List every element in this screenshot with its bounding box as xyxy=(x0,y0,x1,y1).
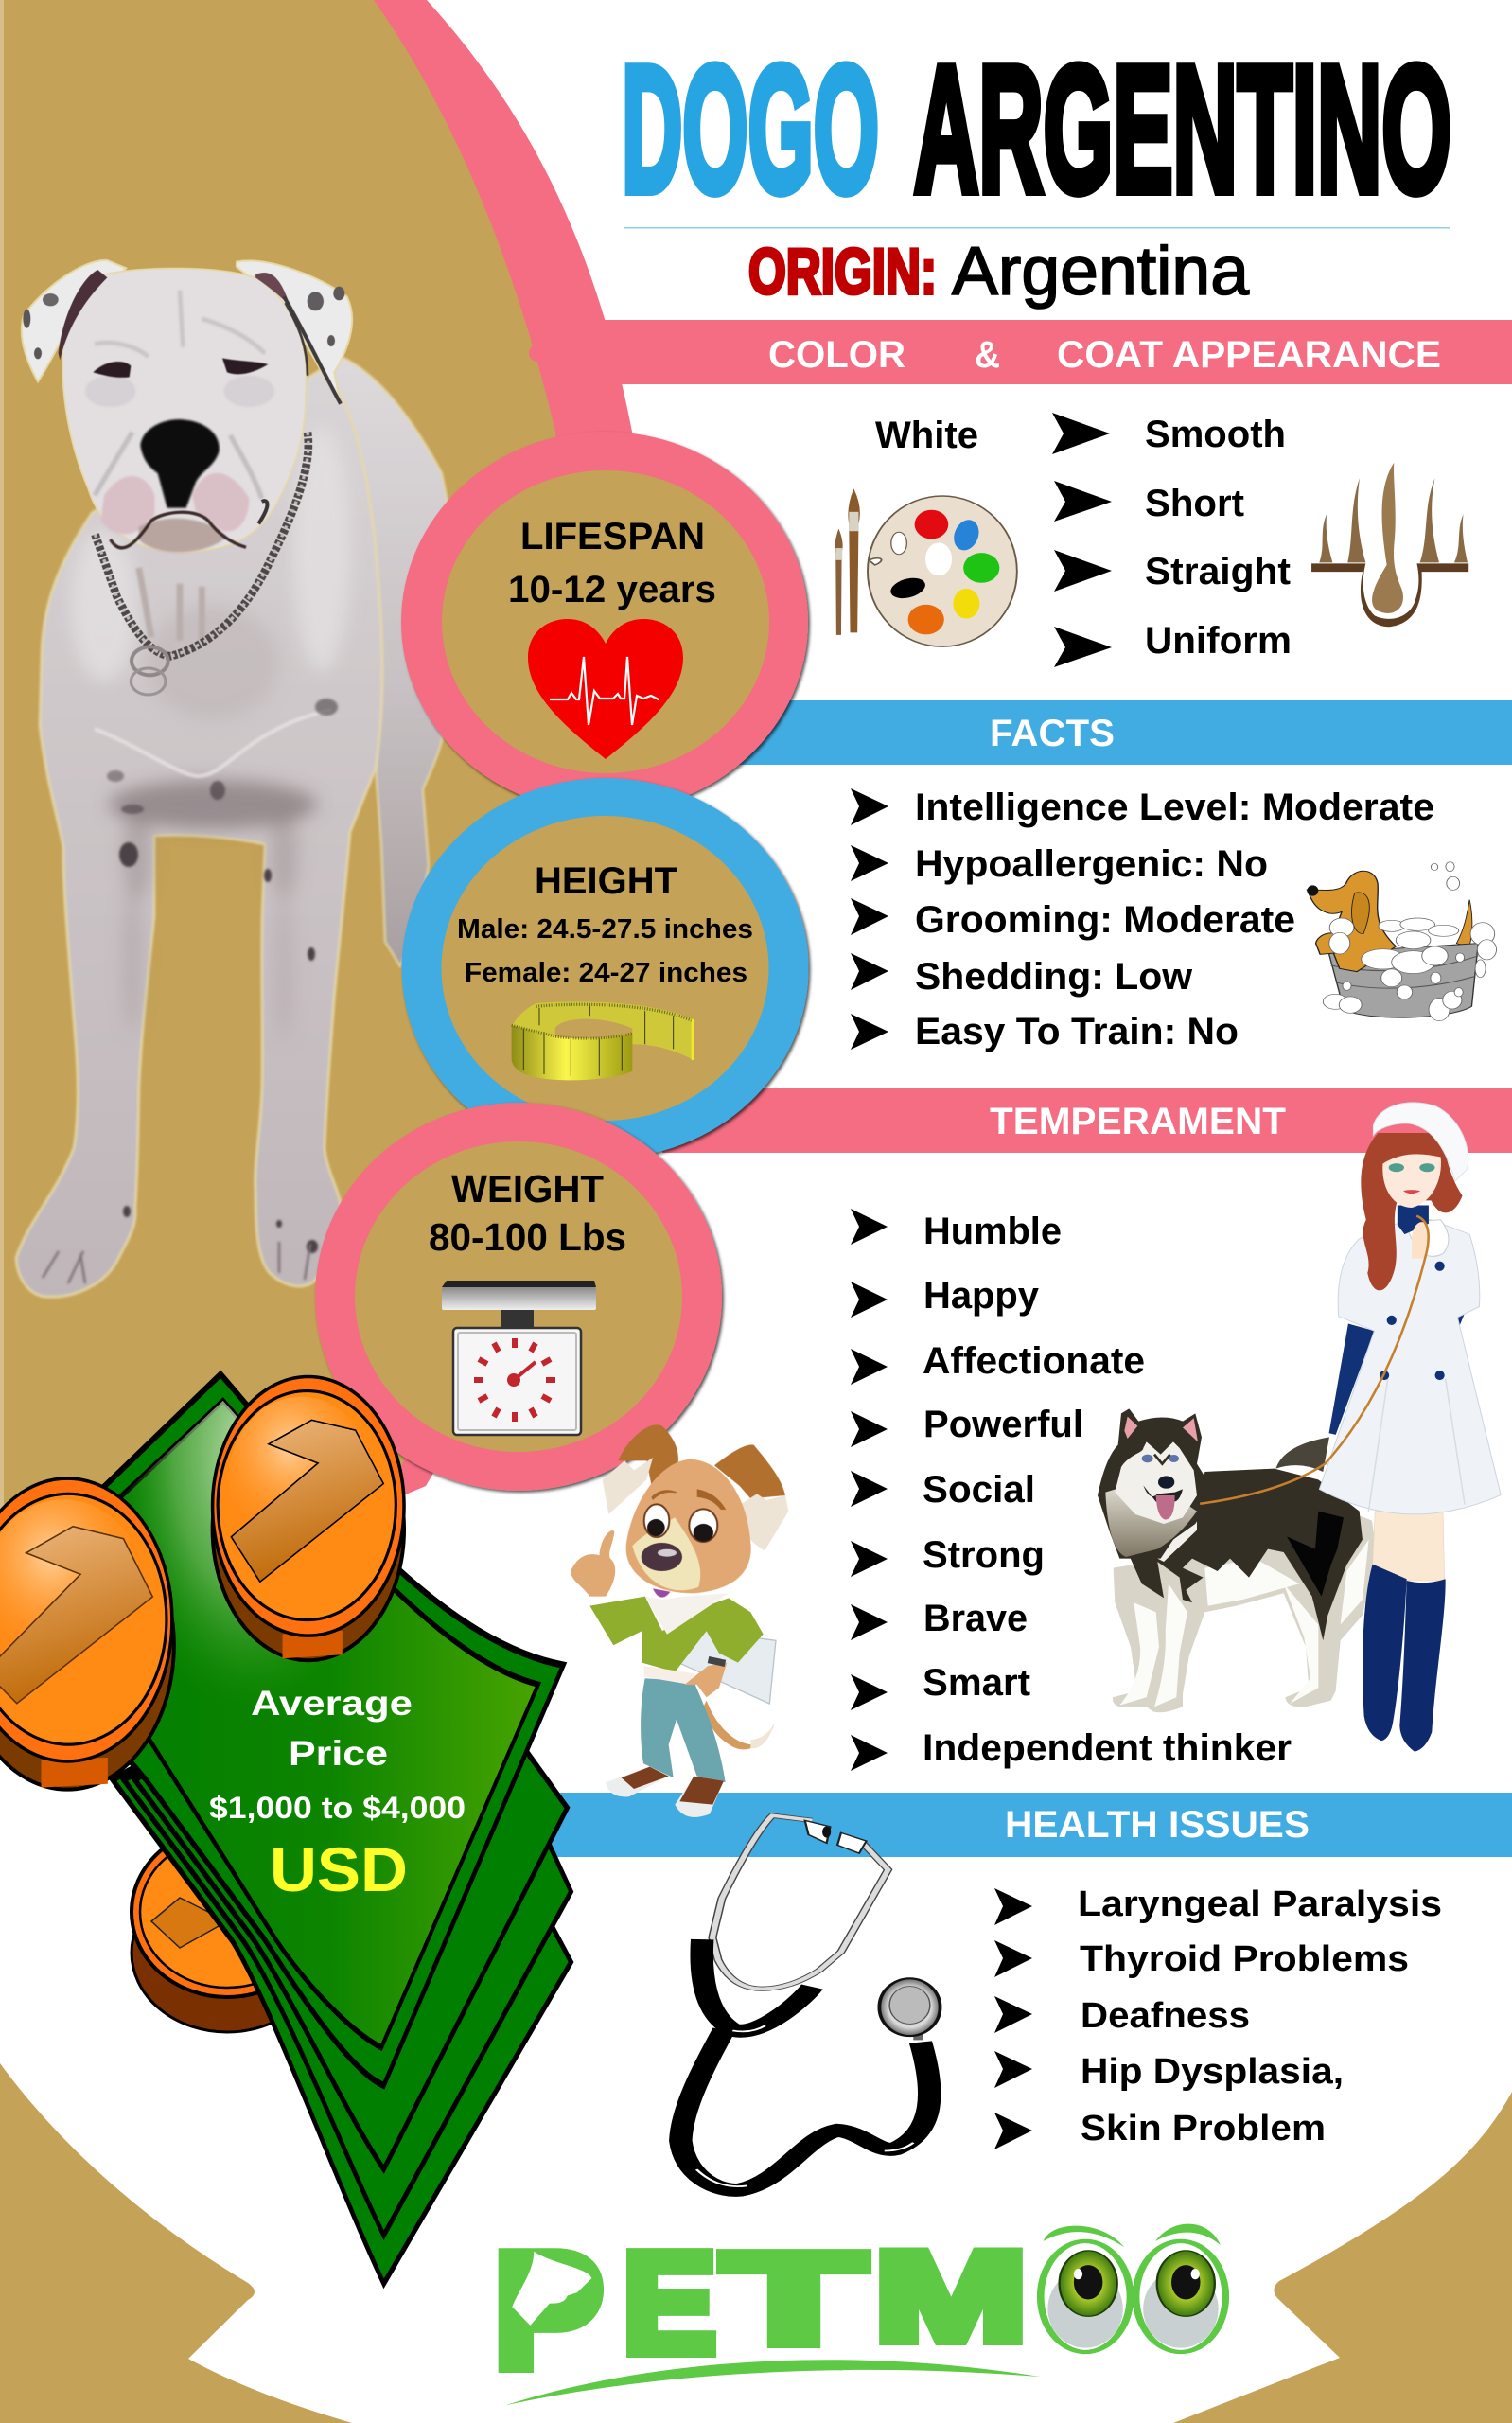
weight circle xyxy=(315,1103,722,1491)
icon: weighing scale xyxy=(442,1281,596,1435)
band: color and coat xyxy=(529,320,1512,384)
coat list: white label and palette xyxy=(835,415,1017,646)
head and ruff xyxy=(1098,1408,1204,1559)
price text: Average xyxy=(251,1684,413,1723)
white neck stripe xyxy=(1157,1517,1197,1562)
arrow and trait: short: Short xyxy=(1145,483,1244,524)
nose xyxy=(140,419,220,508)
temperament list xyxy=(851,1209,1292,1771)
dog body and front legs xyxy=(16,369,382,1297)
girl lower body xyxy=(1363,1512,1446,1752)
band: temperament xyxy=(662,1088,1512,1153)
issue: skin problem: Skin Problem xyxy=(1081,2109,1326,2149)
lifespan circle: 10-12 years xyxy=(508,569,716,610)
bill third layer xyxy=(124,1658,571,2236)
origin line xyxy=(748,234,1250,310)
light legs and underbody xyxy=(1113,1514,1377,1712)
eyes xyxy=(644,1504,669,1537)
lifespan circle xyxy=(401,432,808,812)
stethoscope xyxy=(680,1815,941,2190)
trait: brave xyxy=(851,1598,1028,1640)
coat list: white label and palette: White xyxy=(875,415,978,456)
logo letters: T xyxy=(724,2227,864,2370)
lifespan circle: LIFESPAN xyxy=(520,516,705,557)
price text: USD xyxy=(270,1834,408,1904)
trait: social: Social xyxy=(923,1469,1035,1511)
coat xyxy=(1319,1220,1501,1514)
fact: easy to train: Easy To Train: No xyxy=(915,1011,1239,1052)
icon: dog in bath tub xyxy=(1307,862,1497,1021)
tail xyxy=(1275,1437,1329,1472)
trait: happy: Happy xyxy=(923,1275,1040,1317)
arrow and trait: straight: Straight xyxy=(1145,551,1291,592)
band: facts: FACTS xyxy=(990,713,1115,754)
neck folds xyxy=(139,568,202,641)
dog toes xyxy=(43,1242,310,1283)
icon: hair follicle xyxy=(1311,463,1468,627)
hand xyxy=(1412,1222,1429,1259)
icon: heart with pulse xyxy=(528,619,683,759)
trait: independent thinker: Independent thinker xyxy=(923,1727,1292,1769)
rear body and leg xyxy=(322,350,449,966)
issue: laryngeal paralysis: Laryngeal Paralysis xyxy=(1078,1884,1442,1924)
bill back layer xyxy=(113,1658,571,2284)
left ear xyxy=(22,260,126,381)
coin behind bills xyxy=(132,1827,323,2032)
issue: skin problem xyxy=(994,2109,1326,2149)
beret xyxy=(1373,1103,1468,1181)
shoes xyxy=(606,1767,669,1796)
hand and fist xyxy=(571,1530,615,1597)
issue: hip dysplasia: Hip Dysplasia, xyxy=(1081,2052,1344,2092)
issue: hip dysplasia xyxy=(994,2051,1344,2092)
trait: powerful: Powerful xyxy=(923,1404,1083,1445)
logo letters xyxy=(493,2218,1027,2402)
trait: humble xyxy=(851,1209,1062,1252)
face xyxy=(1382,1147,1441,1208)
legs jeans xyxy=(641,1678,726,1782)
health issues list xyxy=(994,1884,1442,2149)
sweater xyxy=(589,1597,764,1672)
logo letters: E xyxy=(623,2222,716,2382)
issue: deafness: Deafness xyxy=(1081,1996,1250,2036)
muzzle shading xyxy=(85,291,274,552)
ears xyxy=(618,1424,678,1493)
band: facts xyxy=(738,700,1512,765)
price text xyxy=(209,1684,466,1904)
height circle: Male: 24.5-27.5 inches xyxy=(457,914,753,945)
tan corner bottom left xyxy=(0,2063,352,2423)
logo letters: P xyxy=(493,2218,604,2402)
dog head and ears xyxy=(22,260,352,695)
tan left panel xyxy=(0,0,564,1666)
mouth xyxy=(111,512,246,548)
price text: $1,000 to $4,000 xyxy=(209,1791,466,1825)
tail xyxy=(703,1701,774,1749)
dog spots xyxy=(107,699,338,1253)
leash xyxy=(1200,1216,1429,1504)
bill front face xyxy=(14,1401,538,2047)
trait: smart: Smart xyxy=(923,1662,1030,1704)
trait: happy xyxy=(851,1275,1040,1318)
trait: social xyxy=(851,1469,1035,1511)
chest and belly shading xyxy=(71,426,350,1041)
issue: deafness xyxy=(994,1996,1250,2036)
right ear xyxy=(237,261,352,404)
left lighter edge strip xyxy=(0,0,4,1656)
facts list xyxy=(851,787,1434,1052)
pink arc behind tan panel xyxy=(0,0,647,1666)
chain collar xyxy=(95,433,308,695)
band: color and coat: & xyxy=(975,334,1000,376)
issue: thyroid problems: Thyroid Problems xyxy=(1080,1939,1409,1979)
trait: strong: Strong xyxy=(923,1534,1045,1576)
trait: affectionate: Affectionate xyxy=(923,1340,1145,1382)
coin left xyxy=(0,1478,174,1790)
husky dog illustration xyxy=(1098,1408,1377,1712)
main dog photo illustration xyxy=(16,260,449,1297)
bill second layer xyxy=(134,1658,567,2169)
fact: grooming: Grooming: Moderate xyxy=(915,899,1295,941)
fact: intelligence: Intelligence Level: Moderate xyxy=(915,787,1434,828)
money bills stack xyxy=(0,1374,571,2284)
chest fold lines xyxy=(95,710,331,776)
girl with leash illustration xyxy=(1200,1103,1501,1752)
price text: Price xyxy=(289,1734,388,1773)
head xyxy=(626,1459,751,1593)
band: health issues: HEALTH ISSUES xyxy=(1005,1804,1310,1846)
icon: paint palette and brushes xyxy=(835,488,1017,646)
arrow and trait: uniform xyxy=(1054,620,1292,667)
petmoo logo xyxy=(493,2218,1225,2405)
trait: brave: Brave xyxy=(923,1598,1028,1639)
arrow and trait: short xyxy=(1054,481,1244,524)
title: DOGO xyxy=(622,29,879,230)
band: color and coat: COAT APPEARANCE xyxy=(1057,334,1441,376)
logo eyes and swoosh xyxy=(505,2224,1225,2405)
title xyxy=(622,29,1451,230)
icon: measuring tape xyxy=(512,1001,694,1080)
bill front outer xyxy=(0,1374,563,2085)
origin line: ORIGIN: xyxy=(748,236,937,308)
sleeves xyxy=(1329,1323,1374,1435)
hair xyxy=(1361,1133,1463,1290)
height circle: HEIGHT xyxy=(535,860,677,902)
weight circle: WEIGHT xyxy=(451,1167,604,1211)
band: color and coat: COLOR xyxy=(768,334,905,376)
trait: powerful xyxy=(851,1404,1083,1447)
black patch xyxy=(1287,1512,1344,1597)
height circle xyxy=(401,778,808,1158)
arrow and trait: straight xyxy=(1054,550,1291,592)
arrow and trait: uniform: Uniform xyxy=(1145,620,1292,662)
arrow and trait: smooth xyxy=(1052,413,1286,455)
trait: smart xyxy=(851,1662,1030,1710)
height circle: Female: 24-27 inches xyxy=(465,958,747,988)
cartoon dog mascot xyxy=(571,1424,788,1817)
trait: strong xyxy=(851,1534,1045,1577)
nose xyxy=(642,1543,682,1571)
foam xyxy=(1323,862,1497,1021)
arrow and trait: smooth: Smooth xyxy=(1145,414,1286,455)
coat list: traits xyxy=(1052,413,1292,667)
girl upper body xyxy=(1200,1103,1501,1514)
trait: affectionate xyxy=(851,1340,1145,1385)
band: health issues xyxy=(544,1793,1512,1857)
book xyxy=(675,1616,776,1704)
trait: humble: Humble xyxy=(923,1211,1062,1252)
coin top xyxy=(213,1377,404,1660)
weight circle: 80-100 Lbs xyxy=(429,1215,626,1259)
fact: shedding: Shedding: Low xyxy=(915,956,1193,998)
skull xyxy=(62,269,306,552)
tan corner bottom right xyxy=(1173,2092,1512,2423)
logo letters: M xyxy=(875,2227,1027,2367)
origin line: Argentina xyxy=(952,234,1250,310)
band: temperament: TEMPERAMENT xyxy=(990,1101,1286,1142)
ear interiors xyxy=(59,270,107,360)
dark coat xyxy=(1129,1469,1363,1640)
eyes xyxy=(93,362,131,378)
fact: hypoallergenic: Hypoallergenic: No xyxy=(915,843,1268,885)
